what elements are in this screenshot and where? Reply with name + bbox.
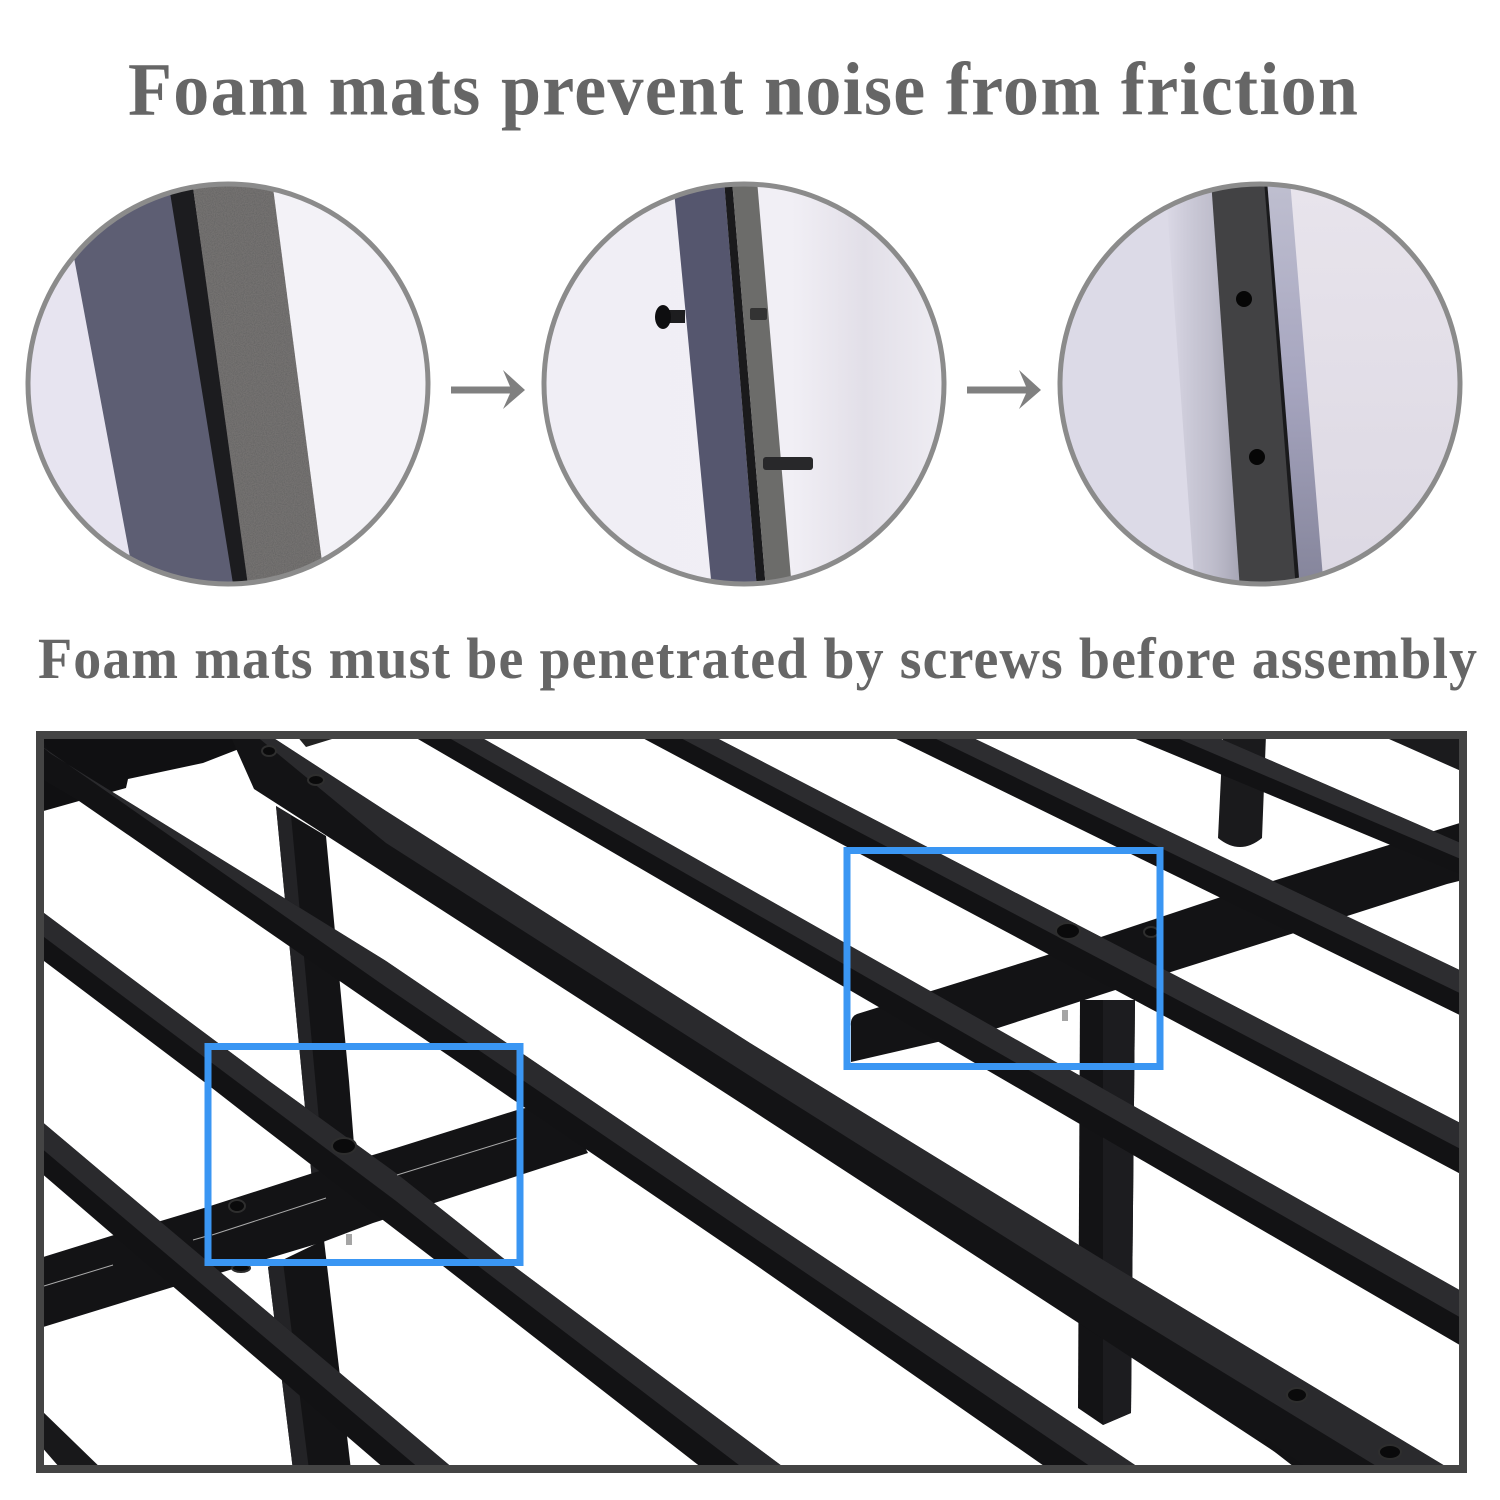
highlight box left (208, 1046, 520, 1262)
title: Foam mats prevent noise from friction (128, 47, 1358, 131)
screw hole upper (1236, 291, 1252, 307)
arrow 1 (451, 370, 525, 409)
back leg (1218, 735, 1266, 847)
beam highlight (44, 1138, 517, 1286)
subtitle: Foam mats must be penetrated by screws before assembly (38, 627, 1477, 691)
corner bracket (1272, 1450, 1295, 1465)
screws (229, 746, 1401, 1459)
right leg (1078, 1000, 1135, 1425)
rails (40, 735, 1470, 1475)
right cross beam (851, 822, 1463, 1062)
highlight box right (847, 850, 1160, 1066)
panel frame (40, 735, 1463, 1469)
top left bracket (44, 739, 237, 811)
circle photo 1: foam strip on rail (28, 180, 428, 600)
screw head left (655, 305, 685, 329)
arrow 2 (967, 370, 1041, 409)
circle photo 2: foam strip with screws (544, 180, 944, 590)
bolts (346, 1010, 1068, 1245)
screw hole lower (1249, 449, 1265, 465)
left cross beam (40, 1100, 588, 1328)
bed frame photo panel (40, 735, 1470, 1475)
screw tip lower (763, 457, 813, 470)
left leg (268, 806, 356, 1470)
screw tip upper (750, 308, 767, 320)
circle photo 3: assembled rail with holes (1060, 180, 1460, 590)
